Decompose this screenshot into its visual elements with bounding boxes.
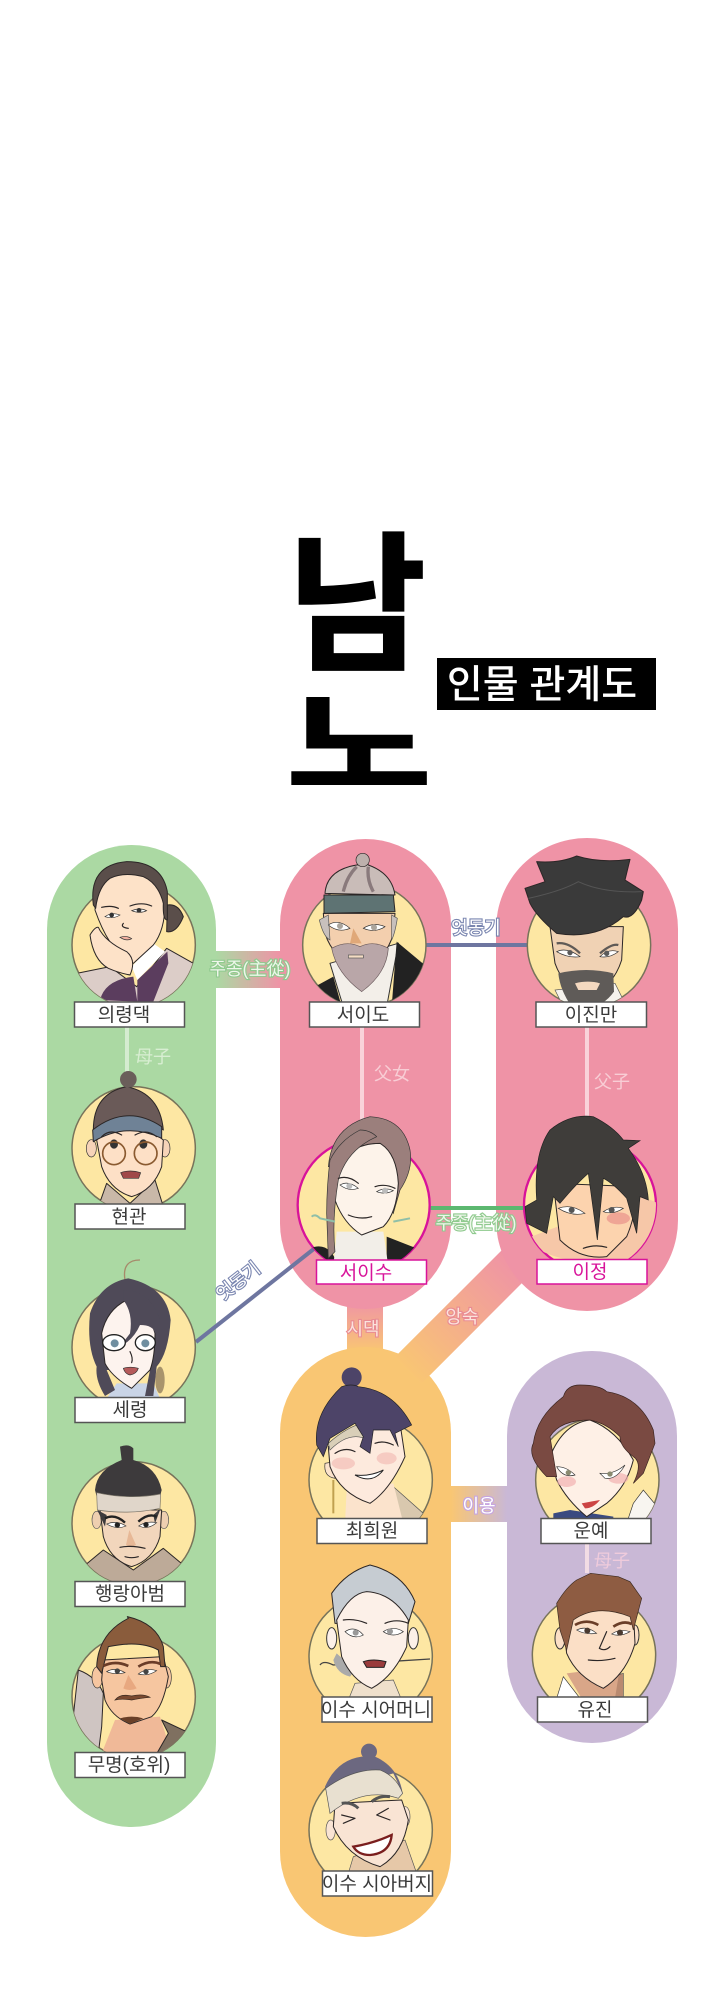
label: 세령: 세령 xyxy=(113,1399,147,1421)
label: 현관 xyxy=(75,1204,185,1229)
panel: purple group xyxy=(507,1351,677,1743)
label: 무명(호위): 무명(호위) xyxy=(88,1754,170,1776)
relation line: 세령 서이수 엇동기 xyxy=(196,1248,315,1342)
label: 이진만 xyxy=(536,1002,646,1027)
relation line: 서이수 이정 주종 xyxy=(430,1206,526,1233)
relation label: 앙숙: 앙숙 xyxy=(445,1307,479,1327)
portrait: 의령댁 xyxy=(72,862,195,1007)
label: 서이수: 서이수 xyxy=(340,1262,392,1284)
label: 이정 xyxy=(537,1260,647,1284)
portrait: 세령 xyxy=(72,1260,195,1409)
label: 최희원: 최희원 xyxy=(346,1520,398,1542)
connector: 주종 band xyxy=(210,951,286,988)
relation line: 의령댁 현관 母子 xyxy=(125,1027,171,1075)
label: 이정: 이정 xyxy=(573,1261,607,1283)
label: 운예 xyxy=(541,1518,651,1544)
label: 서이도: 서이도 xyxy=(337,1004,389,1026)
label: 운예: 운예 xyxy=(574,1520,608,1542)
label: 유진: 유진 xyxy=(578,1699,612,1721)
label: 세령 xyxy=(75,1398,185,1422)
label: 의령댁: 의령댁 xyxy=(98,1004,150,1026)
relation line: 서이도 서이수 父女 xyxy=(360,1027,410,1122)
label: 이수 시아버지: 이수 시아버지 xyxy=(322,1873,432,1895)
connector: 시댁 band xyxy=(347,1295,383,1355)
relation line: 이진만 이정 父子 xyxy=(585,1027,630,1119)
portrait: 이수 시아버지 xyxy=(308,1744,434,1870)
panel: orange group xyxy=(280,1347,451,1937)
title calligraphy: 노: 노 xyxy=(286,653,432,819)
relation line: 운예 유진 母子: 母子 xyxy=(594,1547,630,1573)
portrait: 행랑아범 xyxy=(72,1445,195,1590)
portrait: 서이수 xyxy=(298,1117,430,1271)
portrait: 서이도 xyxy=(303,853,427,1007)
relation line: 의령댁 현관 母子: 母子 xyxy=(135,1043,171,1069)
label: 유진 xyxy=(538,1697,648,1722)
label: 서이수 xyxy=(316,1260,426,1284)
connector: 앙숙 band xyxy=(385,1232,545,1395)
title calligraphy: 남: 남 xyxy=(288,485,426,702)
label: 이수 시어머니: 이수 시어머니 xyxy=(321,1699,431,1721)
panel: green group xyxy=(47,845,216,1827)
relation line: 운예 유진 母子 xyxy=(585,1543,630,1573)
relation line: 서이도 이진만 엇동기: 엇동기 xyxy=(451,918,501,938)
relation line: 서이도 이진만 엇동기 xyxy=(425,918,529,947)
panel: pink group left xyxy=(280,839,451,1309)
label: 의령댁 xyxy=(74,1002,184,1027)
label: 무명(호위) xyxy=(75,1752,185,1778)
portrait: 최희원 xyxy=(308,1367,434,1518)
portrait: 이정 xyxy=(524,1116,658,1271)
portrait: 현관 xyxy=(72,1071,195,1210)
label: 현관: 현관 xyxy=(112,1206,146,1228)
portrait: 유진 xyxy=(532,1573,656,1696)
portrait: 운예 xyxy=(531,1384,660,1518)
앙숙 band overlap on orange panel xyxy=(385,1297,480,1395)
relation label: 주종: 주종(主從) xyxy=(209,959,291,979)
label: 행랑아범: 행랑아범 xyxy=(95,1583,165,1605)
label: 이진만: 이진만 xyxy=(565,1004,617,1026)
label: 서이도 xyxy=(310,1002,420,1027)
relation line: 세령 서이수 엇동기: 엇동기 xyxy=(213,1258,264,1304)
relation line: 서이도 서이수 父女: 父女 xyxy=(374,1060,410,1086)
subtitle: 인물 관계도: 인물 관계도 xyxy=(447,664,637,707)
connector: 이용 band xyxy=(445,1486,513,1522)
portrait: 이수 시어머니 xyxy=(308,1564,434,1696)
relation line: 서이수 이정 주종: 주종(主從) xyxy=(435,1213,517,1233)
relation line: 이진만 이정 父子: 父子 xyxy=(594,1068,630,1094)
panel: pink group right xyxy=(496,838,678,1311)
portrait: 무명 xyxy=(70,1617,195,1758)
relation label: 이용: 이용 xyxy=(462,1496,496,1516)
label: 행랑아범 xyxy=(75,1582,185,1606)
label: 최희원 xyxy=(317,1518,427,1544)
portrait: 이진만 xyxy=(525,856,651,1007)
relation label: 시댁: 시댁 xyxy=(346,1319,380,1339)
